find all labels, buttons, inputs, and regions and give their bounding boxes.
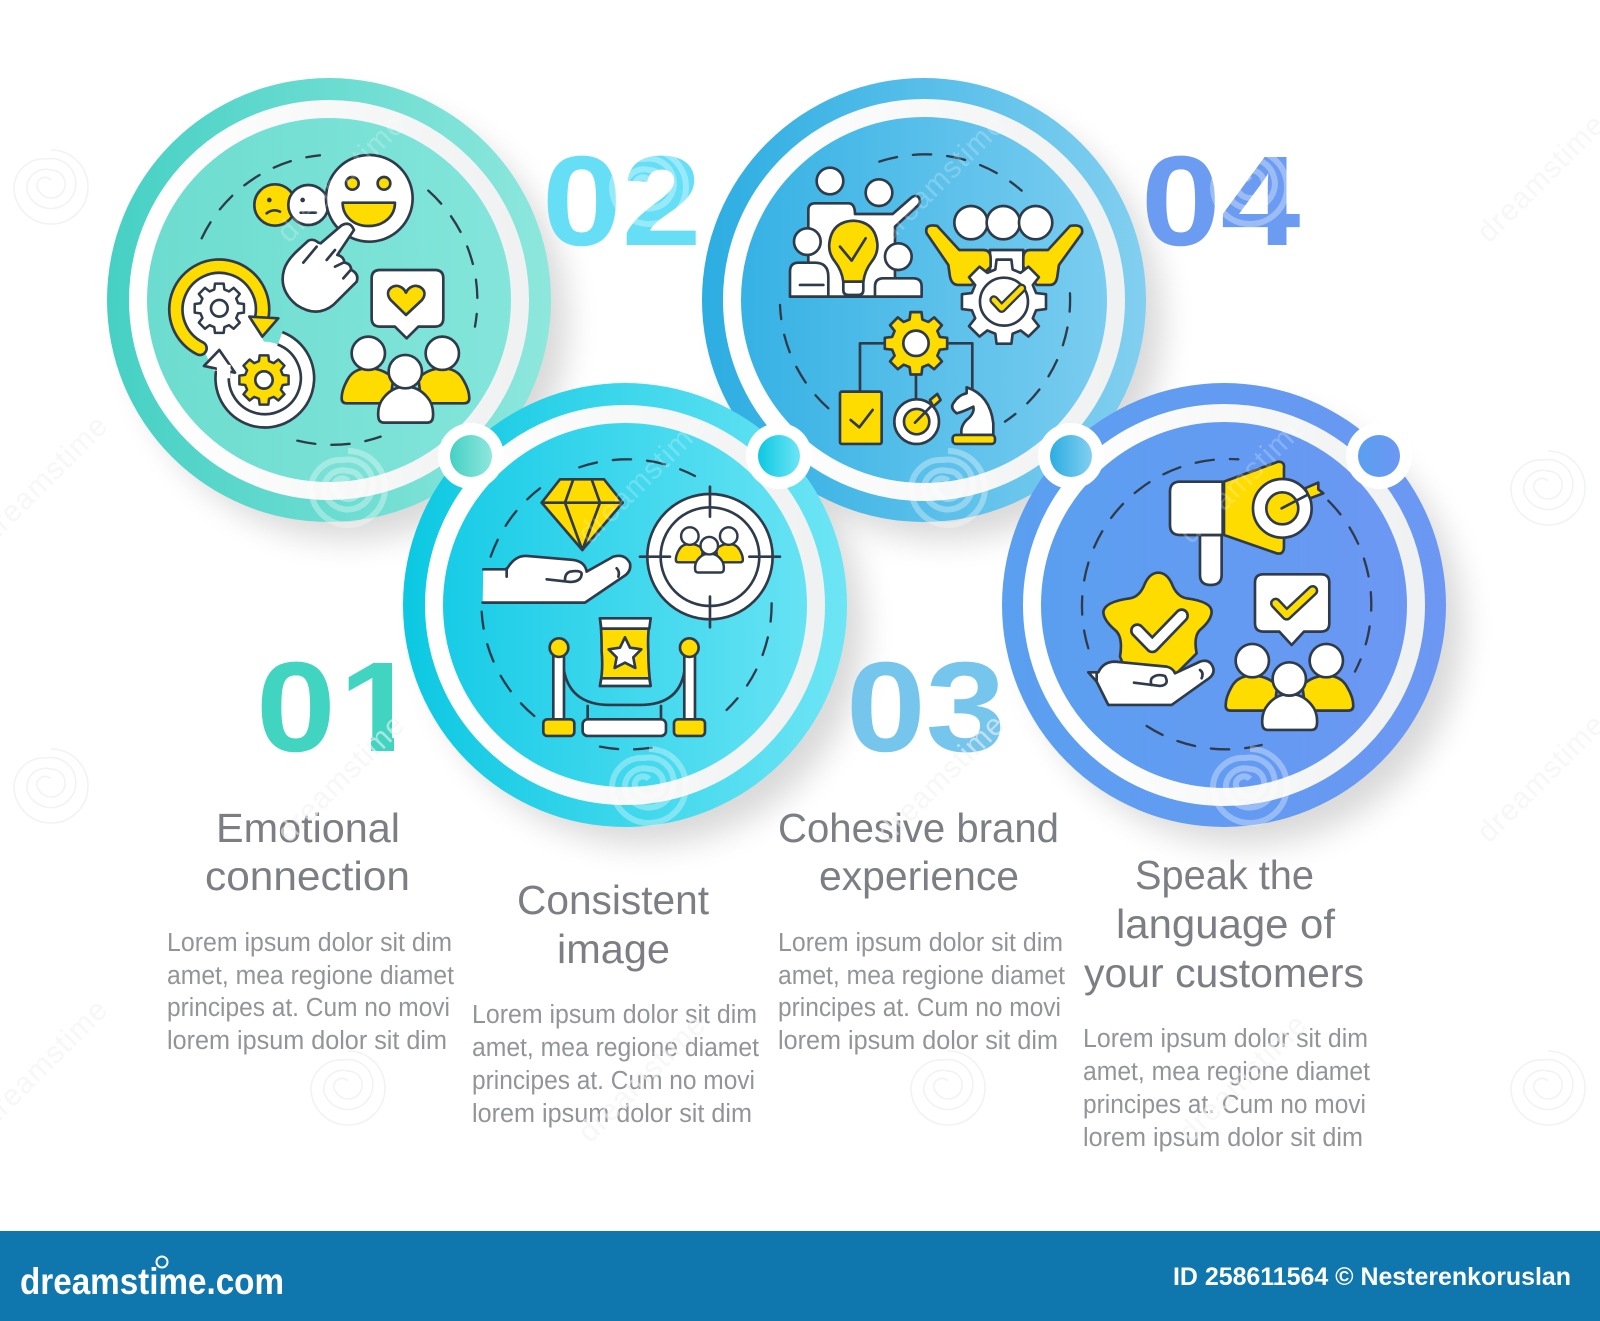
icon: pointing hand — [283, 224, 357, 312]
text block 03: Lorem ipsum dolor sit dim — [778, 929, 1063, 957]
text block 03: lorem ipsum dolor sit dim — [778, 1027, 1058, 1055]
heading: Emotional connection: Emotional — [216, 805, 400, 851]
watermark wordmarks on background: dreamstime — [271, 708, 412, 849]
number 01: 01 — [256, 635, 419, 778]
watermark spirals on panels — [311, 150, 1287, 823]
watermark spirals on background — [14, 150, 1585, 1125]
watermark wordmarks on background: dreamstime — [1173, 1008, 1314, 1149]
text block 01 — [167, 929, 454, 1055]
icon: cycling gears — [176, 266, 307, 422]
icon: feedback faces — [254, 155, 413, 242]
panel: circle 01 emotional connection — [107, 78, 551, 522]
watermark wordmarks: dreamstime — [572, 409, 713, 550]
heading: Cohesive brand experience: Cohesive brand — [778, 805, 1059, 851]
watermark wordmarks: dreamstime — [871, 108, 1012, 249]
heading: Speak the language of your customers — [1084, 852, 1364, 996]
heading: Emotional connection: connection — [205, 853, 410, 899]
text block 01: principes at. Cum no movi — [167, 994, 450, 1022]
icon: customers — [342, 337, 469, 423]
text block 04: principes at. Cum no movi — [1083, 1091, 1366, 1119]
text block 03: principes at. Cum no movi — [778, 994, 1061, 1022]
number 03: 03 — [846, 635, 1005, 778]
text block 02 — [472, 1001, 759, 1128]
heading: Consistent image — [517, 877, 710, 972]
icon: star on hand — [1088, 573, 1214, 705]
text block 01: lorem ipsum dolor sit dim — [167, 1027, 447, 1055]
text block 01: amet, mea regione diamet — [167, 962, 454, 990]
heading: Cohesive brand experience — [778, 805, 1059, 899]
text block 04: amet, mea regione diamet — [1083, 1058, 1370, 1086]
watermark wordmarks on background — [0, 108, 1600, 1149]
panel: circle 03 cohesive brand experience — [702, 78, 1146, 522]
footer credit: ID 258611564 © Nesterenkoruslan — [1173, 1263, 1571, 1291]
text block 02: principes at. Cum no movi — [472, 1067, 755, 1095]
icon: diamond on hand — [483, 479, 630, 603]
panel: circle 02 consistent image — [403, 383, 847, 827]
heading: Consistent image: Consistent — [517, 877, 710, 923]
text block 04: lorem ipsum dolor sit dim — [1083, 1124, 1363, 1152]
text block 02: lorem ipsum dolor sit dim — [472, 1100, 752, 1128]
icon: team with idea — [790, 168, 922, 297]
icon: check speech bubble — [1255, 574, 1329, 645]
icons: speak the language — [1082, 459, 1371, 749]
heading: Cohesive brand experience: experience — [819, 853, 1019, 899]
watermark wordmarks on background: dreamstime — [572, 1008, 713, 1149]
footer bar — [0, 1231, 1600, 1321]
footer logo: dreamstime.com — [20, 1261, 284, 1302]
icon: strategy flow — [840, 312, 995, 444]
heading: Emotional connection — [205, 805, 410, 899]
heading: Speak the language of your customers: Speak the — [1135, 852, 1314, 898]
watermark wordmarks on background: dreamstime — [871, 708, 1012, 849]
watermark wordmarks: dreamstime — [1173, 409, 1314, 550]
heading: Speak the language of your customers: language of — [1116, 901, 1336, 947]
icons: consistent image — [482, 459, 780, 749]
text block 04: Lorem ipsum dolor sit dim — [1083, 1025, 1368, 1053]
icon: team and gear — [926, 206, 1082, 344]
connector dots — [438, 423, 1412, 489]
heading: Consistent image: image — [557, 926, 670, 972]
heading: Speak the language of your customers: your customers — [1084, 950, 1364, 996]
panel: circle 04 speak the language — [1002, 383, 1446, 827]
text block 03: amet, mea regione diamet — [778, 962, 1065, 990]
icons: emotional connection — [176, 155, 477, 445]
number 04: 04 — [1141, 129, 1300, 272]
text block 01: Lorem ipsum dolor sit dim — [167, 929, 452, 957]
icon: heart speech bubble — [372, 270, 443, 338]
icons: cohesive brand experience — [780, 154, 1082, 444]
text block 04 — [1083, 1025, 1370, 1152]
icon: target audience — [640, 487, 780, 627]
panel shadows — [132, 104, 1463, 845]
watermark wordmarks — [271, 108, 1314, 550]
icon: customers — [1226, 644, 1353, 730]
watermark wordmarks: dreamstime — [271, 108, 412, 249]
number 02: 02 — [542, 129, 701, 272]
icon: premium product display — [543, 618, 705, 736]
text block 02: amet, mea regione diamet — [472, 1034, 759, 1062]
icon: megaphone with target — [1170, 462, 1323, 585]
text block 03 — [778, 929, 1065, 1055]
text block 02: Lorem ipsum dolor sit dim — [472, 1001, 757, 1029]
